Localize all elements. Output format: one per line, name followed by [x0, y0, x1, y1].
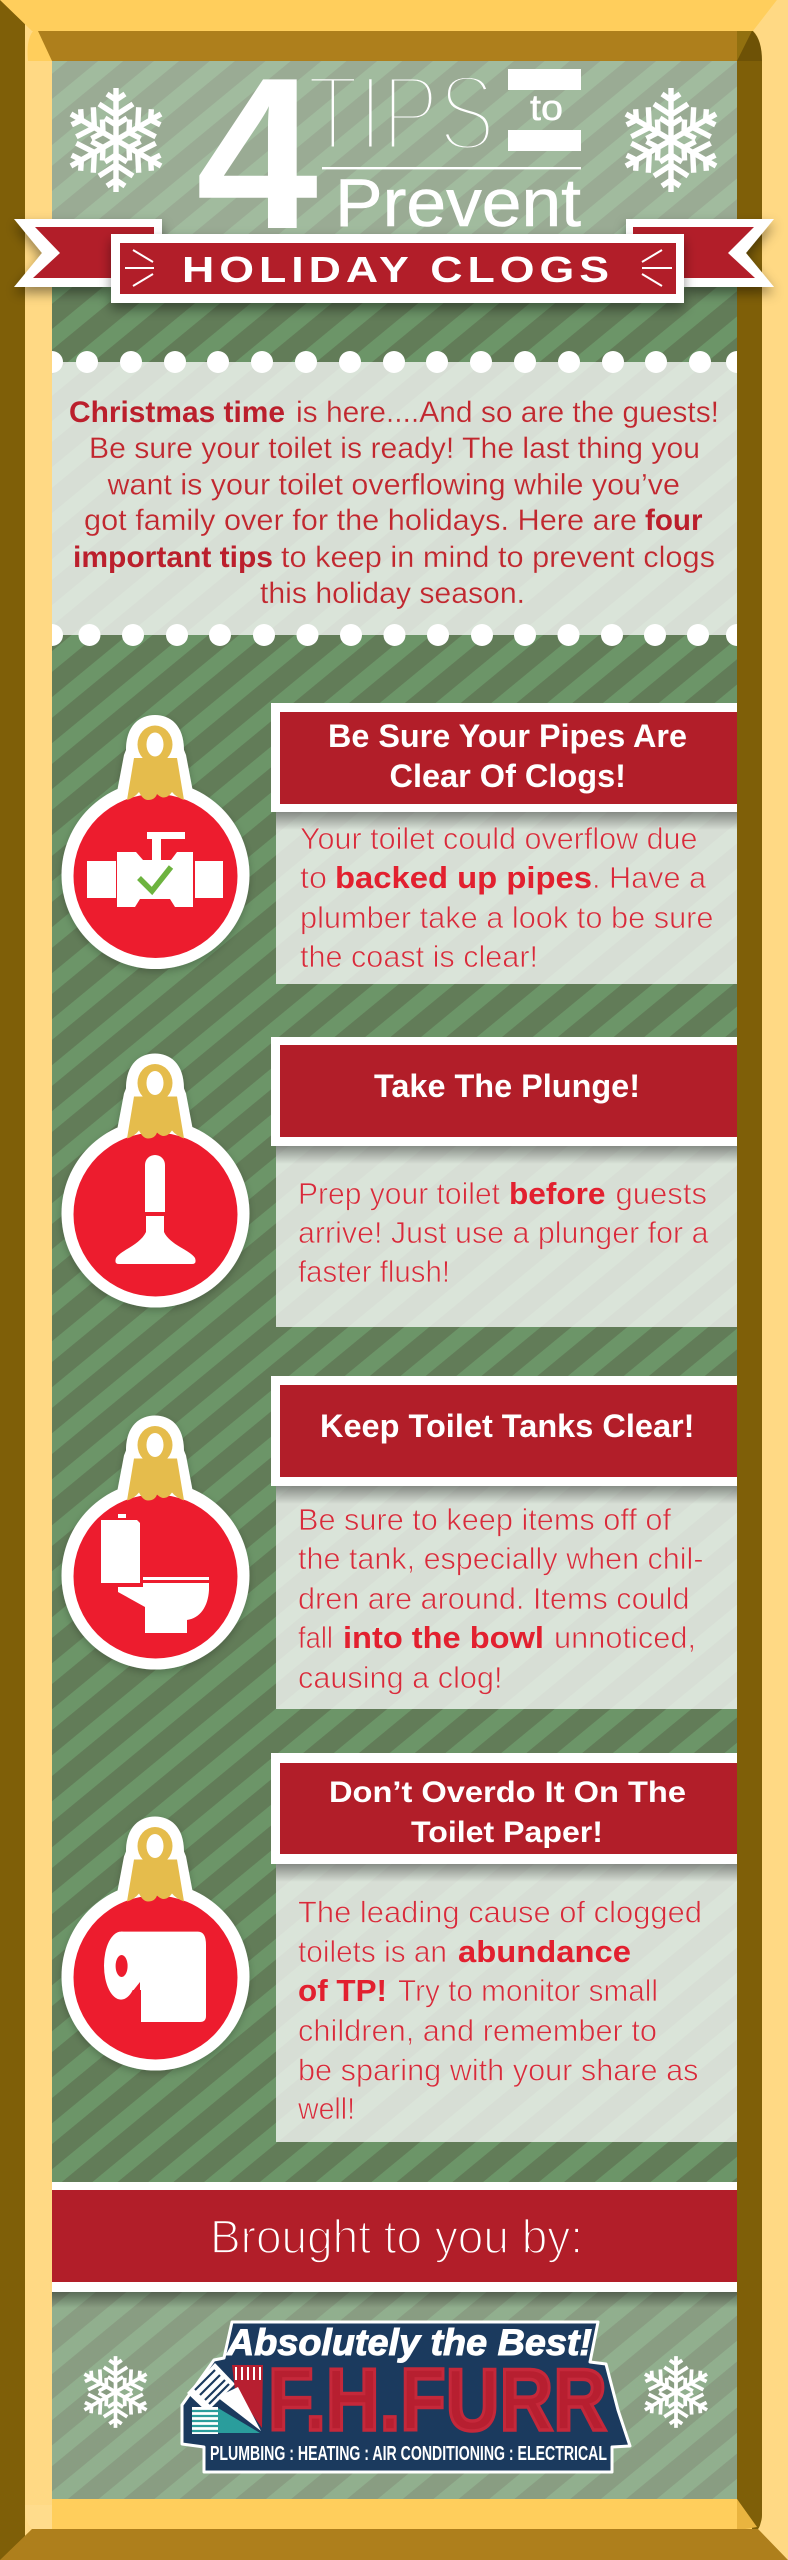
- heading: tip 4: Don’t Overdo It On The: [329, 1776, 686, 1809]
- ribbon text: HOLIDAY CLOGS: [182, 249, 614, 290]
- tip 1: [62, 703, 737, 984]
- intro text: four: [645, 504, 703, 537]
- word Prevent: Prevent: [335, 165, 581, 241]
- heading: tip 4: Toilet Paper!: [411, 1816, 603, 1849]
- panel: tip 1 body: Your toilet could overflow due: [300, 822, 698, 856]
- panel: tip 2 body: guests: [616, 1177, 707, 1211]
- panel: tip 3 body: dren are around. Items could: [298, 1582, 690, 1616]
- heading: tip 1: Be Sure Your Pipes Are: [328, 718, 687, 754]
- intro text: Christmas time: [69, 396, 285, 429]
- panel: tip 3 body: into the bowl: [343, 1621, 544, 1655]
- panel: tip 1 body: to: [300, 861, 327, 895]
- bottom dots: [52, 624, 737, 646]
- top dots: [52, 351, 737, 373]
- word TIPS: TIPS: [307, 52, 495, 173]
- banner: brought to you by: [52, 2182, 737, 2292]
- title: [199, 69, 581, 228]
- panel: tip 2 body: before: [509, 1177, 606, 1211]
- heading: tip 1: Clear Of Clogs!: [390, 758, 626, 794]
- icon: toilet: [101, 1514, 209, 1633]
- heading: tip 1: [271, 703, 737, 812]
- ornament: valve: [62, 715, 250, 969]
- panel: tip 3 body: causing a clog!: [298, 1661, 502, 1695]
- ornament: toilet paper: [62, 1816, 250, 2070]
- heading: tip 3: [271, 1376, 737, 1486]
- tip 2: [62, 1037, 737, 1327]
- logo: Absolutely the Best!: [226, 2322, 592, 2363]
- intro text: want is your toilet overflowing while you’ve: [106, 468, 680, 502]
- footer shadow: [52, 2292, 737, 2308]
- panel: tip 4 body: be sparing with your share as: [298, 2054, 698, 2088]
- panel: tip 1 body: the coast is clear!: [300, 940, 538, 974]
- panel: tip 2 body: [276, 1146, 737, 1327]
- heading: tip 2: Take The Plunge!: [374, 1068, 640, 1104]
- panel: tip 4 body: The leading cause of clogged: [298, 1896, 702, 1930]
- panel: tip 3 body: fall: [298, 1621, 333, 1655]
- panel: tip 2 body: arrive! Just use a plunger for a: [298, 1216, 709, 1250]
- numeral 4: 4: [196, 32, 318, 274]
- intro text: [69, 396, 719, 610]
- panel: tip 4 body: well!: [297, 2092, 355, 2126]
- panel: tip 1 body: plumber take a look to be sure: [300, 901, 714, 935]
- snowflake left: [62, 88, 170, 192]
- heading: tip 4: [271, 1753, 737, 1864]
- logo icon: [187, 2363, 263, 2434]
- panel: tip 2 body: faster flush!: [298, 1255, 450, 1289]
- heading: tip 2: [271, 1037, 737, 1146]
- snowflake footer left: [79, 2356, 152, 2428]
- panel: tip 3 body: [276, 1486, 737, 1709]
- ornament: plunger: [62, 1054, 250, 1308]
- icon: toilet paper roll: [104, 1932, 206, 2022]
- ribbon banner: [14, 219, 774, 303]
- panel: tip 1 body: backed up pipes: [335, 861, 592, 895]
- intro text: important tips: [73, 541, 273, 574]
- light footer band: [52, 2292, 737, 2499]
- panel: tip 1 body: . Have a: [592, 861, 706, 895]
- tip 3: [62, 1376, 737, 1709]
- panel: tip 3 body: unnoticed,: [554, 1621, 696, 1655]
- panel: tip 3 body: the tank, especially when chil-: [298, 1542, 704, 1576]
- logo: [182, 2322, 630, 2472]
- light top band: [52, 61, 737, 270]
- panel: tip 4 body: abundance: [458, 1935, 631, 1969]
- panel: tip 4 body: toilets is an: [298, 1935, 447, 1969]
- panel: tip 1 body: [276, 812, 737, 984]
- icon: plunger: [115, 1155, 196, 1264]
- tip 4: [62, 1753, 737, 2142]
- intro text: to keep in mind to prevent clogs: [281, 541, 715, 574]
- snowflake right: [617, 88, 725, 192]
- intro text: is here....And so are the guests!: [296, 396, 719, 429]
- panel: tip 2 body: Prep your toilet: [298, 1177, 501, 1211]
- logo: F.H.FURR: [268, 2350, 607, 2449]
- snowflake footer right: [639, 2356, 713, 2428]
- banner: brought to you by: Brought to you by:: [210, 2210, 583, 2263]
- panel: intro: [52, 351, 737, 646]
- panel: tip 4 body: [276, 1864, 737, 2142]
- panel: tip 3 body: Be sure to keep items off of: [298, 1503, 672, 1537]
- intro text: got family over for the holidays. Here are: [84, 504, 637, 537]
- intro text: Be sure your toilet is ready! The last thing you: [89, 432, 700, 465]
- panel: tip 4 body: children, and remember to: [298, 2014, 657, 2048]
- panel: tip 4 body: Try to monitor small: [398, 1974, 658, 2008]
- icon: pipe valve with check: [87, 832, 223, 907]
- word to with bars: [508, 69, 581, 151]
- word to with bars: to: [530, 87, 563, 128]
- intro text: this holiday season.: [260, 577, 525, 610]
- logo: PLUMBING : HEATING : AIR CONDITIONING : ELECTRICAL: [210, 2443, 607, 2465]
- panel: tip 4 body: of TP!: [298, 1974, 387, 2008]
- heading: tip 3: Keep Toilet Tanks Clear!: [320, 1408, 694, 1444]
- ornament: toilet: [62, 1416, 250, 1670]
